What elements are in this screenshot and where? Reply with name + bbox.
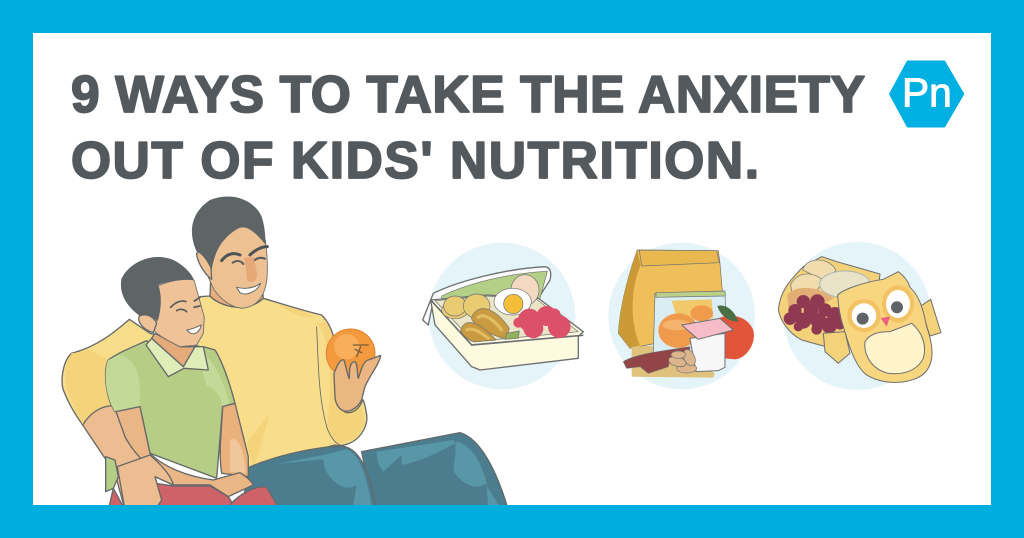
man's forearm and hand xyxy=(83,406,173,510)
man's nose shadow xyxy=(243,257,257,282)
yogurt cup xyxy=(682,318,733,372)
near leg highlight xyxy=(277,449,372,505)
orange xyxy=(326,329,375,378)
boy's face xyxy=(153,279,204,347)
man's smile xyxy=(237,283,261,294)
apple xyxy=(717,305,754,359)
bento food: buns xyxy=(791,260,836,295)
boy's shirt xyxy=(106,341,235,478)
owl eye rings xyxy=(847,285,914,332)
boy's collar xyxy=(146,338,208,377)
eggs xyxy=(494,275,539,315)
far leg xyxy=(362,433,508,510)
owl belly xyxy=(865,323,925,374)
boy's ear xyxy=(139,315,157,333)
oranges xyxy=(658,305,713,348)
jerky xyxy=(623,347,690,373)
grapes xyxy=(784,294,845,335)
lunch box body xyxy=(431,295,583,370)
owl beak xyxy=(881,317,890,327)
circle: lunch box background xyxy=(429,243,575,389)
owl eye right xyxy=(886,290,910,318)
boy's neck xyxy=(152,333,195,367)
bento food: dip xyxy=(820,271,870,298)
man's hair xyxy=(192,196,266,270)
boy's left arm xyxy=(116,407,253,497)
ziplock bag xyxy=(653,291,726,357)
strawberries xyxy=(513,306,571,338)
bento box xyxy=(778,257,880,346)
crackers xyxy=(442,294,490,319)
boy's eyes and smile xyxy=(171,297,200,312)
title: OUT OF KIDS' NUTRITION. xyxy=(71,131,759,189)
owl body xyxy=(838,272,932,382)
lunch box lid xyxy=(423,267,551,325)
title xyxy=(71,65,865,189)
owl wing left xyxy=(823,332,850,363)
title: 9 WAYS TO TAKE THE ANXIETY xyxy=(71,65,865,123)
logo: Pn hexagon: Pn xyxy=(902,70,952,116)
man's hand over boy's leg xyxy=(117,455,173,510)
circle: bag background xyxy=(608,243,755,389)
man's neck xyxy=(210,278,263,307)
man's sweater xyxy=(62,296,367,468)
illustration: lunch box and paper bag xyxy=(423,243,755,389)
illustration: father and son with orange xyxy=(62,196,508,510)
almonds xyxy=(667,348,698,373)
logo: Pn hexagon xyxy=(891,62,963,126)
man's brows and eyes xyxy=(222,247,267,261)
owl wing right xyxy=(920,299,941,336)
boy's far shirt hem xyxy=(106,457,118,492)
boy's hair xyxy=(121,257,194,322)
owl eye left xyxy=(852,303,876,328)
near leg xyxy=(243,446,376,510)
circle: owl background xyxy=(783,242,931,390)
illustration: owl bento box xyxy=(778,242,941,390)
man's face xyxy=(208,227,267,308)
far leg highlight xyxy=(377,440,502,510)
sandwiches xyxy=(461,309,519,342)
boy's right arm xyxy=(220,403,248,477)
man's ear xyxy=(197,252,212,279)
bag xyxy=(618,250,725,378)
boy's pants xyxy=(108,483,237,510)
man's right hand xyxy=(334,355,381,411)
bento food: crumble xyxy=(787,288,834,308)
